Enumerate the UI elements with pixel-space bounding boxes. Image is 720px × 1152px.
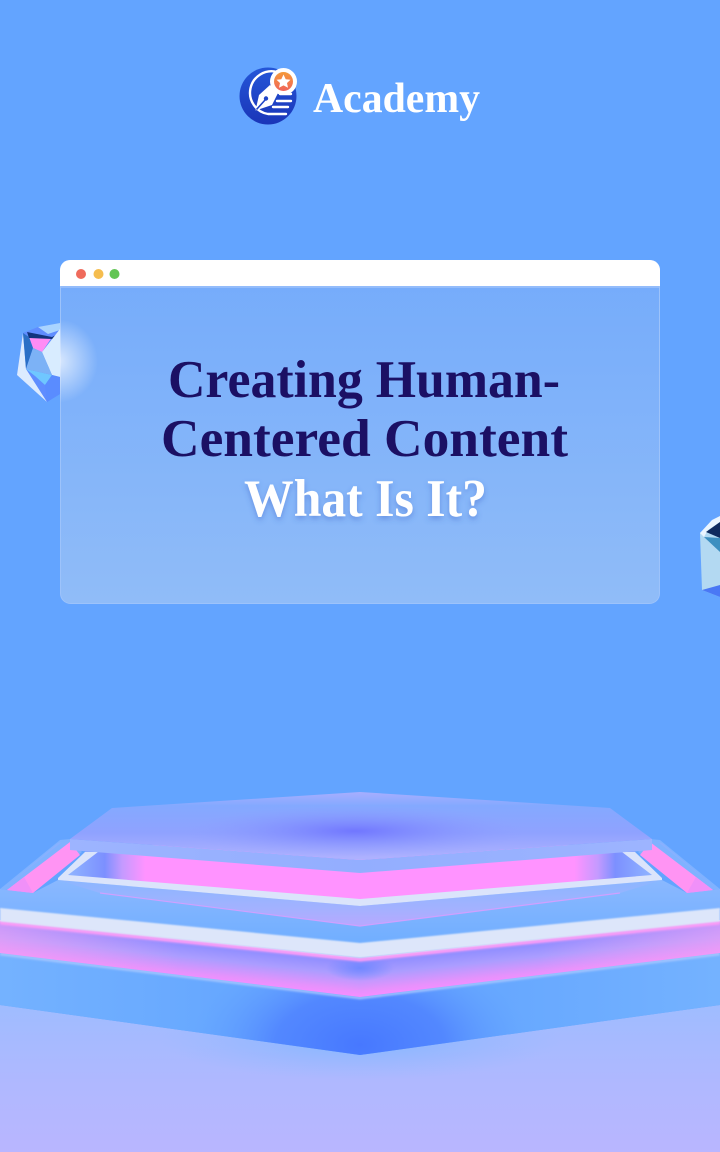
browser title bar [60, 260, 660, 286]
logo: Academy [240, 68, 480, 124]
title: Creating Human- [168, 351, 560, 409]
logo wordmark: Academy [313, 76, 480, 122]
title [161, 351, 568, 528]
panel: browser window [18, 260, 660, 604]
window control dots [76, 269, 120, 279]
top plate side [70, 839, 652, 873]
podium [0, 792, 720, 1152]
podium upper step [58, 880, 662, 926]
podium neon band [0, 920, 720, 997]
white frame [58, 852, 662, 906]
podium white neon strip [0, 908, 720, 960]
podium middle tier [0, 880, 720, 945]
title: Centered Content [161, 410, 568, 468]
icon: right crystal [700, 516, 720, 597]
top plate face [70, 792, 652, 860]
right side ridge [638, 839, 720, 893]
left side ridge [0, 839, 82, 893]
podium lower wall [0, 950, 720, 1055]
podium floor [0, 1005, 720, 1152]
title: What Is It? [244, 470, 487, 528]
panel body [60, 260, 660, 604]
pink recess [65, 845, 655, 902]
icon: pen nib badge [240, 68, 297, 124]
glow on panel edge [60, 323, 94, 399]
icon: left crystal [17, 323, 60, 402]
